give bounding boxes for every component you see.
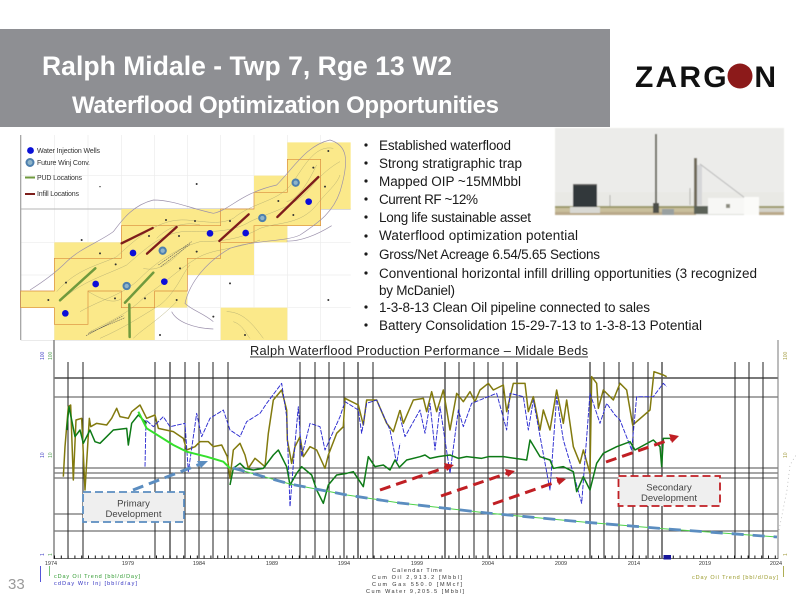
- x axis year labels: 2014: [628, 561, 640, 567]
- center chart statistics: [366, 568, 464, 595]
- left chart legend: cdDay Wtr Inj [bbl/d/ay]: [54, 581, 137, 587]
- center chart statistics: Cum Water 9,205.5 [Mbbl]: [366, 589, 464, 595]
- right chart legend: cDay Oil Trend [bbl/d/Day]: [692, 575, 778, 581]
- logo: Zargon: ZARGON: [635, 61, 776, 94]
- bullet list: Conventional horizontal infill drilling opportunities (3 recognized: [379, 266, 757, 281]
- x axis year labels: 2004: [482, 561, 494, 567]
- bullet list: by McDaniel): [379, 283, 455, 298]
- right axis labels: 100: [783, 351, 789, 360]
- subtitle: Waterflood Optimization Opportunities: [72, 92, 499, 119]
- right axis labels: 1: [783, 553, 789, 556]
- map legend: Water Injection Wells: [37, 148, 100, 155]
- bullet list: Established waterflood: [379, 138, 511, 153]
- x axis year labels: 1979: [122, 561, 134, 567]
- axis tick marks: [54, 556, 778, 558]
- callout: primary development: Development: [106, 509, 162, 520]
- production performance chart: 100: [48, 351, 54, 360]
- x axis year labels: 2019: [699, 561, 711, 567]
- future water injection conversions: [123, 179, 299, 289]
- map panel: [21, 134, 351, 340]
- title: Ralph Midale - Twp 7, Rge 13 W2: [42, 51, 452, 81]
- map legend: PUD Locations: [37, 175, 82, 182]
- header banner: [0, 29, 610, 127]
- x axis year labels: 1984: [193, 561, 205, 567]
- vertical grid lines: [68, 362, 763, 558]
- right axis labels: [783, 351, 789, 556]
- well symbols small dots: [47, 150, 329, 336]
- yellow land sections: [21, 142, 351, 340]
- x axis year labels: 1994: [338, 561, 350, 567]
- production performance chart: [40, 340, 796, 595]
- right axis labels: 10: [783, 452, 789, 458]
- callout: primary development: Primary: [117, 498, 150, 510]
- callout: secondary development: [618, 476, 720, 506]
- center chart statistics: Calendar Time: [392, 568, 442, 574]
- callout: secondary development: Secondary: [646, 482, 692, 494]
- dotted right edge curve: [779, 455, 796, 530]
- callout: primary development: [83, 492, 184, 522]
- water injection wells: [62, 198, 312, 317]
- left and right axes: [54, 340, 778, 559]
- map legend: [25, 147, 100, 198]
- bullet list: Gross/Net Acreage 6.54/5.65 Sections: [379, 247, 600, 262]
- x axis year labels: 1999: [411, 561, 423, 567]
- map base grid: [21, 134, 351, 340]
- right chart legend: [692, 566, 784, 581]
- x axis year labels: 2024: [770, 561, 782, 567]
- bullet list: Battery Consolidation 15-29-7-13 to 1-3-8-13 Potential: [379, 318, 702, 333]
- x axis year labels: 1989: [266, 561, 278, 567]
- production performance chart: 10: [48, 452, 54, 458]
- green production curve: [67, 407, 670, 503]
- primary decline forecast line: [233, 468, 777, 537]
- arrow: primary development: [133, 461, 208, 490]
- orange unit outline: [21, 159, 321, 324]
- light green primary decline curve: [138, 412, 230, 468]
- left axis labels: 1: [40, 553, 46, 556]
- center chart statistics: Cum Oil 2,913.2 [Mbbl]: [372, 575, 462, 581]
- current date marker: [664, 555, 671, 560]
- production performance chart: 1: [48, 553, 54, 556]
- pipeline dashes: [86, 242, 192, 336]
- bullet list: [364, 138, 757, 333]
- chart title: Ralph Waterflood Production Performance – Midale Beds: [250, 343, 588, 358]
- bullet list: Strong stratigraphic trap: [379, 156, 522, 171]
- left chart legend: cDay Oil Trend [bbl/d/Day]: [54, 574, 140, 580]
- blue water injection curve: [145, 383, 667, 507]
- bullet list: Current RF ~12%: [379, 192, 478, 207]
- left axis labels: 100: [40, 351, 46, 360]
- page number: 33: [8, 576, 25, 593]
- bullet list: 1-3-8-13 Clean Oil pipeline connected to sales: [379, 300, 650, 315]
- left axis labels: [40, 351, 46, 556]
- left axis labels: 10: [40, 452, 46, 458]
- x axis year labels: 1974: [45, 561, 57, 567]
- bullet list: Long life sustainable asset: [379, 210, 531, 225]
- bullet list: Waterflood optimization potential: [379, 228, 578, 243]
- infill location lines: [122, 177, 318, 254]
- x axis year labels: [45, 561, 782, 567]
- horizontal grid lines: [54, 378, 778, 531]
- center chart statistics: Cum Gas 550.0 [MMcf]: [372, 582, 462, 588]
- bullet list: Mapped OIP ~15MMbbl: [379, 174, 521, 189]
- map legend: Future Winj Conv.: [37, 160, 90, 167]
- x axis year labels: 2009: [555, 561, 567, 567]
- photo: oil battery site: [555, 128, 784, 215]
- callout: secondary development: Development: [641, 493, 697, 504]
- outer boundary purple lines: [30, 140, 346, 329]
- arrows: secondary development trend: [380, 434, 679, 504]
- contour lines: [57, 148, 340, 338]
- map legend: Infill Locations: [37, 191, 80, 198]
- PUD location lines: [60, 268, 153, 337]
- left chart legend: [40, 566, 140, 587]
- olive oil rate curve: [63, 372, 667, 490]
